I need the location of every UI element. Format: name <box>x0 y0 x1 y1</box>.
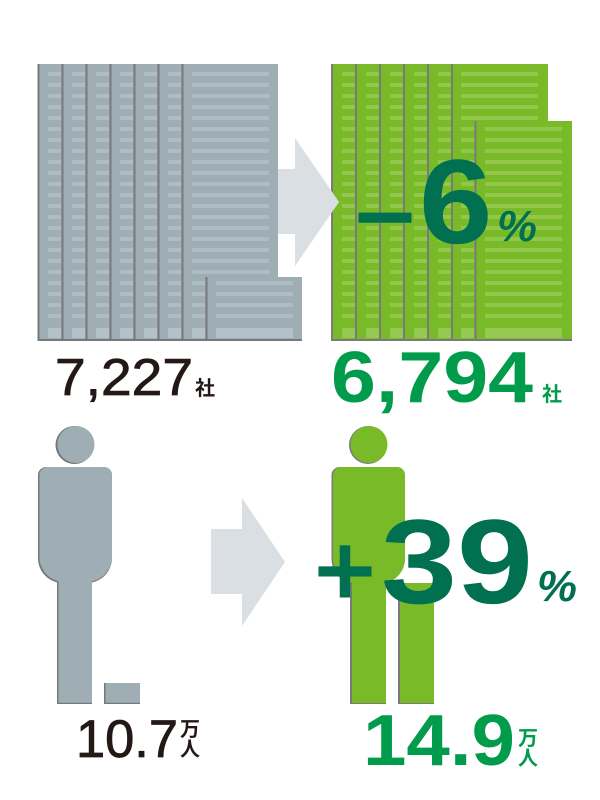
value: 7,227 companies: 7,227 <box>55 349 193 407</box>
change: plus 39 percent: 39 <box>381 495 533 629</box>
value: 14.9 man people: 14.9 <box>363 701 515 781</box>
change: minus 6 percent: − <box>355 161 415 273</box>
value: 6,794 companies: 6,794 <box>331 338 533 418</box>
value: 10.7 man people: 10.7 <box>76 710 178 769</box>
value: 6,794 companies: 社 <box>542 383 562 406</box>
value: 14.9 man people: 万 <box>518 728 538 750</box>
change: plus 39 percent <box>315 495 577 629</box>
icon: green person <box>331 426 434 704</box>
icon: gray buildings <box>38 64 302 341</box>
value: 7,227 companies: 社 <box>195 377 215 400</box>
arrow: workers <box>211 498 285 626</box>
value: 14.9 man people: 人 <box>518 748 538 770</box>
change: plus 39 percent: + <box>315 515 375 627</box>
change: minus 6 percent <box>355 135 537 273</box>
icon: gray person <box>38 426 140 704</box>
arrow: companies <box>278 138 339 266</box>
value: 10.7 man people: 人 <box>180 739 200 761</box>
change: minus 6 percent: % <box>497 202 537 251</box>
change: plus 39 percent: % <box>537 562 577 611</box>
change: minus 6 percent: 6 <box>419 135 492 269</box>
icon: green buildings <box>331 64 572 341</box>
value: 10.7 man people: 万 <box>180 719 200 741</box>
